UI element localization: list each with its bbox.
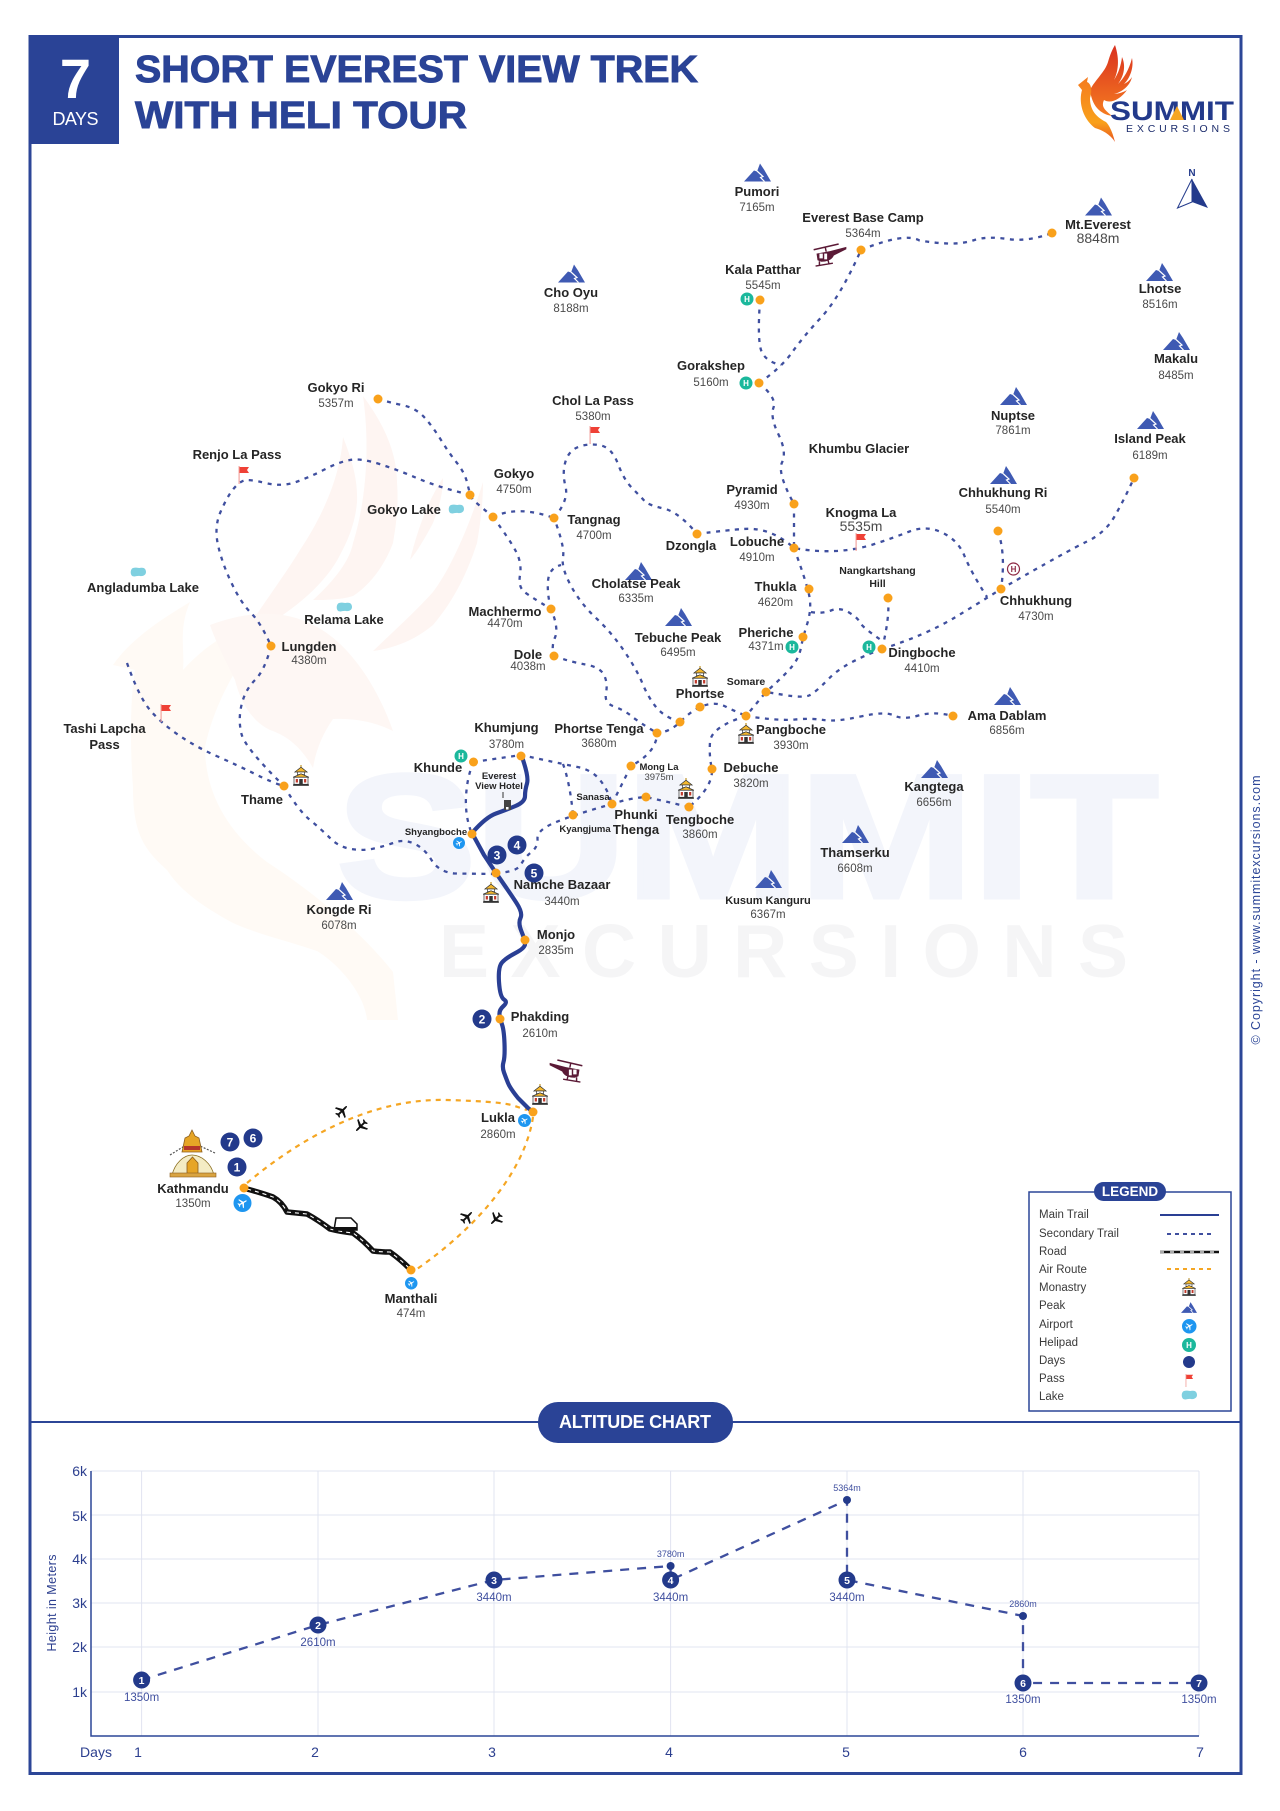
place: Everest View Hotel — [475, 771, 523, 810]
legend labels: Secondary Trail — [1039, 1228, 1119, 1240]
peak: Kangtega: 6656m — [916, 797, 952, 809]
peak: Cho Oyu: 8188m — [553, 303, 589, 315]
x axis labels: 7 — [1196, 1744, 1204, 1760]
place: Everest Base Camp: 5364m — [845, 228, 881, 240]
altitude values: 2610m — [300, 1637, 336, 1649]
place: Machhermo: Machhermo — [469, 604, 542, 619]
place: Dole — [510, 647, 558, 673]
altitude line — [142, 1500, 1199, 1683]
legend symbols — [1160, 1215, 1219, 1399]
pass: Tashi Lapcha Pass: Tashi Lapcha — [63, 721, 146, 736]
place: Dole: Dole — [514, 647, 542, 662]
place: Sanasa: Sanasa — [576, 792, 610, 803]
place: Kyangjuma: Kyangjuma — [559, 824, 611, 835]
altitude values: 2860m — [1009, 1599, 1037, 1609]
y axis title: Height in Meters — [45, 1554, 59, 1652]
place: Lobuche — [730, 534, 798, 564]
title: WITH HELI TOUR — [135, 95, 467, 137]
place: Phakding: 2610m — [522, 1028, 558, 1040]
day badge 5 — [524, 864, 544, 882]
y axis ticks: 6k — [72, 1463, 88, 1479]
y axis ticks: 5k — [72, 1508, 88, 1524]
place: Pheriche — [739, 625, 808, 654]
place: Everest Base Camp — [802, 210, 924, 254]
day badge 4 — [508, 836, 526, 854]
days badge: 7 — [60, 47, 91, 110]
place: Tangnag: 4700m — [576, 530, 612, 542]
place: Machhermo — [469, 604, 556, 630]
place: Gokyo — [466, 466, 534, 500]
place: Dingboche: H — [866, 643, 872, 652]
place: Dingboche: 4410m — [904, 663, 940, 675]
compass north arrow: N — [1188, 168, 1196, 179]
place: Lungden — [266, 639, 336, 667]
place: Monjo: 2835m — [538, 945, 574, 957]
peak: Kongde Ri: Kongde Ri — [306, 902, 372, 917]
place: Tangnag — [550, 512, 621, 542]
peak: Kusum Kanguru — [725, 870, 811, 921]
peak: Ama Dablam — [948, 687, 1046, 737]
peak: Cholatse Peak — [592, 562, 681, 605]
altitude values: 3440m — [829, 1592, 865, 1604]
place: Namche Bazaar — [483, 868, 610, 908]
legend labels: Road — [1039, 1246, 1066, 1258]
y axis ticks: 2k — [72, 1639, 88, 1655]
place: Namche Bazaar: 3440m — [544, 896, 580, 908]
logo: Summit Excursions — [1078, 45, 1235, 142]
place: Pangboche — [738, 712, 826, 752]
peak: Nuptse — [991, 387, 1035, 437]
place: Sanasa — [576, 792, 616, 808]
place: Phunki Thenga: Thenga — [613, 822, 660, 837]
place: Dole: 4038m — [510, 661, 546, 673]
place: Lukla: Lukla — [481, 1110, 516, 1125]
secondary trails — [127, 233, 1134, 874]
place: Manthali — [385, 1266, 437, 1320]
peak: Makalu: Makalu — [1154, 351, 1198, 366]
peak: Cho Oyu: Cho Oyu — [544, 285, 598, 300]
place: Chhukhung — [996, 563, 1072, 623]
y axis ticks: 3k — [72, 1595, 88, 1611]
place: Gokyo: Gokyo — [494, 466, 534, 481]
place: Pheriche: Pheriche — [739, 625, 793, 640]
peak: Kusum Kanguru: 6367m — [750, 909, 786, 921]
place: Pyramid: 4930m — [734, 500, 770, 512]
place: Monjo — [520, 927, 575, 957]
peak: Pumori: Pumori — [735, 184, 779, 199]
altitude values: 1350m — [124, 1692, 159, 1704]
place: Lukla — [480, 1084, 548, 1141]
place: Nangkartshang Hill: Hill — [869, 578, 886, 590]
panel: legend — [1029, 1182, 1231, 1411]
peak: Makalu: 8485m — [1158, 370, 1194, 382]
place: Khunde: H — [458, 752, 464, 761]
logo phoenix — [1078, 45, 1133, 142]
place: Chhukhung: 4730m — [1018, 611, 1054, 623]
place: Phortse Tenga: Phortse Tenga — [554, 721, 644, 736]
place: Manthali: Manthali — [385, 1291, 437, 1306]
place: Debuche — [708, 760, 778, 790]
airplanes on air route — [332, 1101, 506, 1229]
day badge 7 — [220, 1132, 240, 1152]
pass: Knogma La — [826, 505, 897, 551]
peak: Kangtega — [904, 760, 964, 809]
pass: Tashi Lapcha Pass: Pass — [89, 737, 120, 752]
peak: Lhotse: Lhotse — [1139, 281, 1181, 296]
place: Somare: Somare — [727, 676, 765, 688]
lake: Gokyo Lake — [367, 502, 498, 522]
place: Khumjung: Khumjung — [474, 720, 539, 735]
altitude chart heading: ALTITUDE CHART — [559, 1412, 711, 1432]
legend symbols: H — [1186, 1341, 1192, 1350]
place: Phakding: Phakding — [511, 1009, 569, 1024]
place: Tengboche: Tengboche — [666, 812, 734, 827]
air routes — [247, 1100, 533, 1269]
peak: Cho Oyu — [544, 264, 598, 315]
main trail — [472, 757, 533, 1112]
pass: Knogma La: Knogma La — [826, 505, 897, 520]
place: Machhermo: 4470m — [487, 618, 523, 630]
place: Gokyo Ri: 5357m — [318, 398, 354, 410]
y axis ticks: 1k — [72, 1684, 88, 1700]
peak: Ama Dablam: 6856m — [989, 725, 1025, 737]
place: Kala Patthar — [725, 262, 801, 306]
place: Gorakshep — [677, 358, 764, 390]
pass: Tashi Lapcha Pass — [63, 704, 171, 752]
background watermark — [113, 396, 1158, 1020]
peak: Pumori: 7165m — [739, 202, 775, 214]
place: Phortse Tenga: 3680m — [581, 738, 617, 750]
x axis labels: Days — [80, 1744, 112, 1760]
title — [135, 49, 699, 137]
place: Monjo: Monjo — [537, 927, 575, 942]
lake: Gokyo Lake: Gokyo Lake — [367, 502, 441, 517]
place: Thukla: Thukla — [755, 579, 797, 594]
x axis labels: 6 — [1019, 1744, 1027, 1760]
legend labels: Monastry — [1039, 1282, 1087, 1294]
altitude values: 3440m — [476, 1592, 512, 1604]
altitude points — [133, 1496, 1208, 1692]
place: Gokyo Ri — [307, 380, 382, 410]
peak: Cholatse Peak: Cholatse Peak — [592, 576, 681, 591]
legend labels: Main Trail — [1039, 1209, 1089, 1221]
legend labels: Peak — [1039, 1300, 1065, 1312]
place: Pyramid: Pyramid — [726, 482, 778, 497]
copyright: © Copyright - www.summitexcursions.com — [1249, 776, 1263, 1044]
legend labels: Lake — [1039, 1391, 1064, 1403]
place: Debuche: Debuche — [724, 760, 778, 775]
peak: Tebuche Peak: 6495m — [660, 647, 696, 659]
place: Khunde: Khunde — [414, 760, 462, 775]
peak: Lhotse — [1139, 263, 1181, 311]
lake: Angladumba Lake — [87, 568, 199, 595]
place: Phakding: 2 — [479, 1012, 486, 1026]
peak: Pumori — [735, 164, 779, 214]
peak: Kongde Ri — [306, 882, 372, 932]
x axis labels: 3 — [488, 1744, 496, 1760]
place: Kyangjuma — [559, 810, 611, 835]
place: Nangkartshang Hill — [839, 565, 916, 602]
peak: Island Peak: Island Peak — [1114, 431, 1187, 446]
place: Kathmandu: 1350m — [175, 1198, 211, 1210]
place: Mong La: 3975m — [644, 772, 674, 783]
altitude values: 3780m — [657, 1549, 684, 1559]
altitude values: 5364m — [833, 1483, 861, 1493]
title: SHORT EVEREST VIEW TREK — [135, 49, 699, 91]
lake: Relama Lake — [304, 603, 384, 627]
place: Phakding — [472, 1009, 569, 1040]
helicopter: Everest Base Camp — [814, 244, 846, 266]
pass: Chol La Pass: Chol La Pass — [552, 393, 634, 408]
place: Chhukhung: Chhukhung — [1000, 593, 1072, 608]
watermark word EXCURSIONS: EXCURSIONS — [439, 909, 1128, 993]
peak: Ama Dablam: Ama Dablam — [968, 708, 1046, 723]
day badge 4: 4 — [514, 838, 521, 852]
peak: Tebuche Peak — [635, 608, 722, 659]
peak: Thamserku: Thamserku — [820, 845, 890, 860]
day badge 1 — [228, 1158, 246, 1176]
place: Somare — [727, 676, 770, 696]
logo wordmark: SUMMIT — [1110, 96, 1235, 126]
place: Gorakshep: H — [743, 379, 749, 388]
peak: Tebuche Peak: Tebuche Peak — [635, 630, 722, 645]
pass: Renjo La Pass — [193, 447, 281, 484]
peak: Kongde Ri: 6078m — [321, 920, 357, 932]
place: Gorakshep: Gorakshep — [677, 358, 745, 373]
x axis labels: 2 — [311, 1744, 319, 1760]
place: Mong La: Mong La — [639, 762, 679, 773]
label: Khumbu Glacier: Khumbu Glacier — [809, 441, 909, 456]
place: Gokyo Ri: Gokyo Ri — [307, 380, 365, 395]
x axis labels: 4 — [665, 1744, 673, 1760]
place: Mong La — [626, 762, 679, 783]
place: Gorakshep: 5160m — [693, 377, 729, 389]
days badge — [29, 35, 119, 144]
peak: Makalu — [1154, 332, 1198, 382]
altitude values: 3440m — [653, 1592, 688, 1604]
place: Pangboche: Pangboche — [756, 722, 826, 737]
day badge 6 — [244, 1128, 262, 1148]
intermediate trail stops — [642, 718, 684, 802]
place: Dingboche: Dingboche — [888, 645, 956, 660]
legend labels: Airport — [1039, 1319, 1074, 1331]
place: Khumjung: 3780m — [489, 739, 524, 751]
place: Khunde — [414, 750, 478, 775]
place: Khumjung — [474, 720, 539, 760]
peak: Chhukhung Ri — [959, 466, 1047, 536]
place: Kathmandu: Kathmandu — [157, 1181, 229, 1196]
place: Phunki Thenga: Phunki — [614, 807, 658, 822]
place: Chhukhung: H — [1011, 565, 1017, 574]
place: Everest View Hotel: Everest — [482, 771, 517, 782]
place: Gokyo: 4750m — [496, 484, 532, 496]
altitude chart — [45, 1463, 1217, 1760]
altitude chart heading — [538, 1402, 733, 1443]
altitude points: 3 — [491, 1575, 497, 1587]
peak: Island Peak: 6189m — [1132, 450, 1168, 462]
helicopter: Lukla — [550, 1060, 582, 1082]
altitude points: 2 — [315, 1620, 321, 1632]
place: Tengboche: 3860m — [682, 829, 718, 841]
place: Pyramid — [726, 482, 798, 512]
day badge 3 — [488, 846, 506, 864]
road — [247, 1189, 410, 1269]
logo tagline: EXCURSIONS — [1126, 123, 1230, 135]
legend heading: LEGEND — [1102, 1184, 1158, 1199]
lake: Relama Lake: Relama Lake — [304, 612, 384, 627]
place: Debuche: 3820m — [733, 778, 769, 790]
place: Shyangboche — [405, 827, 476, 849]
legend labels: Days — [1039, 1355, 1065, 1367]
chart divider — [30, 1421, 1241, 1423]
day badge 7: 7 — [227, 1136, 234, 1150]
altitude values: 1350m — [1181, 1694, 1217, 1706]
y axis ticks: 4k — [72, 1551, 88, 1567]
place: Dingboche — [862, 640, 956, 675]
x axis labels: 5 — [842, 1744, 850, 1760]
peak: Kangtega: Kangtega — [904, 779, 964, 794]
place: Namche Bazaar: Namche Bazaar — [514, 877, 610, 892]
chart axes — [91, 1471, 1199, 1736]
pass: Chol La Pass — [552, 393, 634, 444]
peak: Island Peak — [1114, 411, 1187, 482]
place: Lobuche: Lobuche — [730, 534, 784, 549]
peak: Mt. Everest: Mt.Everest — [1065, 217, 1132, 232]
days badge: DAYS — [52, 109, 98, 129]
legend heading — [1094, 1182, 1166, 1201]
place: Everest Base Camp: Everest Base Camp — [802, 210, 924, 225]
legend labels: Pass — [1039, 1373, 1065, 1385]
place: Thukla: 4620m — [758, 597, 793, 609]
day badge 6: 6 — [250, 1132, 257, 1146]
place: Phortse — [676, 666, 724, 712]
altitude points: 7 — [1196, 1678, 1202, 1690]
place: Everest View Hotel: View Hotel — [475, 781, 523, 792]
place: Tangnag: Tangnag — [567, 512, 621, 527]
pass: Knogma La: 5535m — [840, 518, 882, 534]
chart grid — [91, 1471, 1199, 1736]
peak: Nuptse: Nuptse — [991, 408, 1035, 423]
peak: Chhukhung Ri: 5540m — [985, 504, 1021, 516]
place: Phortse: Phortse — [676, 686, 724, 701]
watermark word SUMMIT: SUMMIT — [337, 740, 1158, 935]
pass: Chol La Pass: 5380m — [575, 411, 611, 423]
place: Thame — [241, 765, 309, 807]
place: Pheriche: H — [789, 643, 795, 652]
altitude points: 6 — [1020, 1678, 1026, 1690]
icon: stupa — [170, 1130, 216, 1177]
place: Phunki Thenga — [613, 807, 660, 837]
legend labels: Air Route — [1039, 1264, 1087, 1276]
altitude points: 5 — [844, 1575, 850, 1587]
place: Kala Patthar: H — [744, 295, 750, 304]
place: Shyangboche: Shyangboche — [405, 827, 467, 838]
peak: Mt. Everest: 8848m — [1077, 230, 1119, 246]
place: Lungden: 4380m — [291, 655, 327, 667]
place: Phortse Tenga — [554, 721, 644, 750]
day badge 3: 3 — [494, 848, 501, 862]
place: Kala Patthar: 5545m — [745, 280, 781, 292]
place: Dzongla: Dzongla — [666, 538, 717, 553]
legend labels: Helipad — [1039, 1337, 1078, 1349]
place: Kala Patthar: Kala Patthar — [725, 262, 801, 277]
peak: Kusum Kanguru: Kusum Kanguru — [725, 895, 811, 907]
place: Lungden: Lungden — [282, 639, 336, 654]
altitude points: 1 — [139, 1675, 145, 1687]
legend labels — [1039, 1209, 1119, 1403]
day badge 1: 1 — [234, 1160, 241, 1174]
x axis labels — [80, 1744, 1204, 1760]
y axis ticks — [72, 1463, 88, 1700]
peak: Nuptse: 7861m — [995, 425, 1031, 437]
altitude points: 4 — [668, 1575, 674, 1587]
altitude values — [124, 1483, 1217, 1706]
place: Thukla — [755, 579, 814, 609]
lake: Angladumba Lake: Angladumba Lake — [87, 580, 199, 595]
peak: Mt. Everest — [1048, 198, 1132, 246]
place: Lukla: 2860m — [480, 1129, 516, 1141]
pass: Renjo La Pass: Renjo La Pass — [193, 447, 281, 462]
place: Kathmandu — [157, 1130, 252, 1212]
peak: Cholatse Peak: 6335m — [618, 593, 654, 605]
icon: van — [334, 1218, 357, 1230]
peak: Thamserku — [820, 825, 890, 875]
place: Dzongla — [666, 530, 717, 553]
day badge 5: 5 — [531, 866, 538, 880]
peak: Lhotse: 8516m — [1142, 299, 1178, 311]
place: Lobuche: 4910m — [739, 552, 775, 564]
x axis labels: 1 — [134, 1744, 142, 1760]
compass north arrow — [1178, 168, 1208, 208]
place: Manthali: 474m — [397, 1308, 425, 1320]
place: Pangboche: 3930m — [773, 740, 809, 752]
place: Pheriche: 4371m — [748, 641, 784, 653]
place: Tengboche — [666, 778, 734, 841]
peak: Thamserku: 6608m — [837, 863, 873, 875]
place: Thame: Thame — [241, 792, 283, 807]
watermark phoenix — [113, 396, 483, 1020]
peak: Chhukhung Ri: Chhukhung Ri — [959, 485, 1047, 500]
altitude values: 1350m — [1005, 1694, 1041, 1706]
place: Nangkartshang Hill: Nangkartshang — [839, 565, 916, 577]
